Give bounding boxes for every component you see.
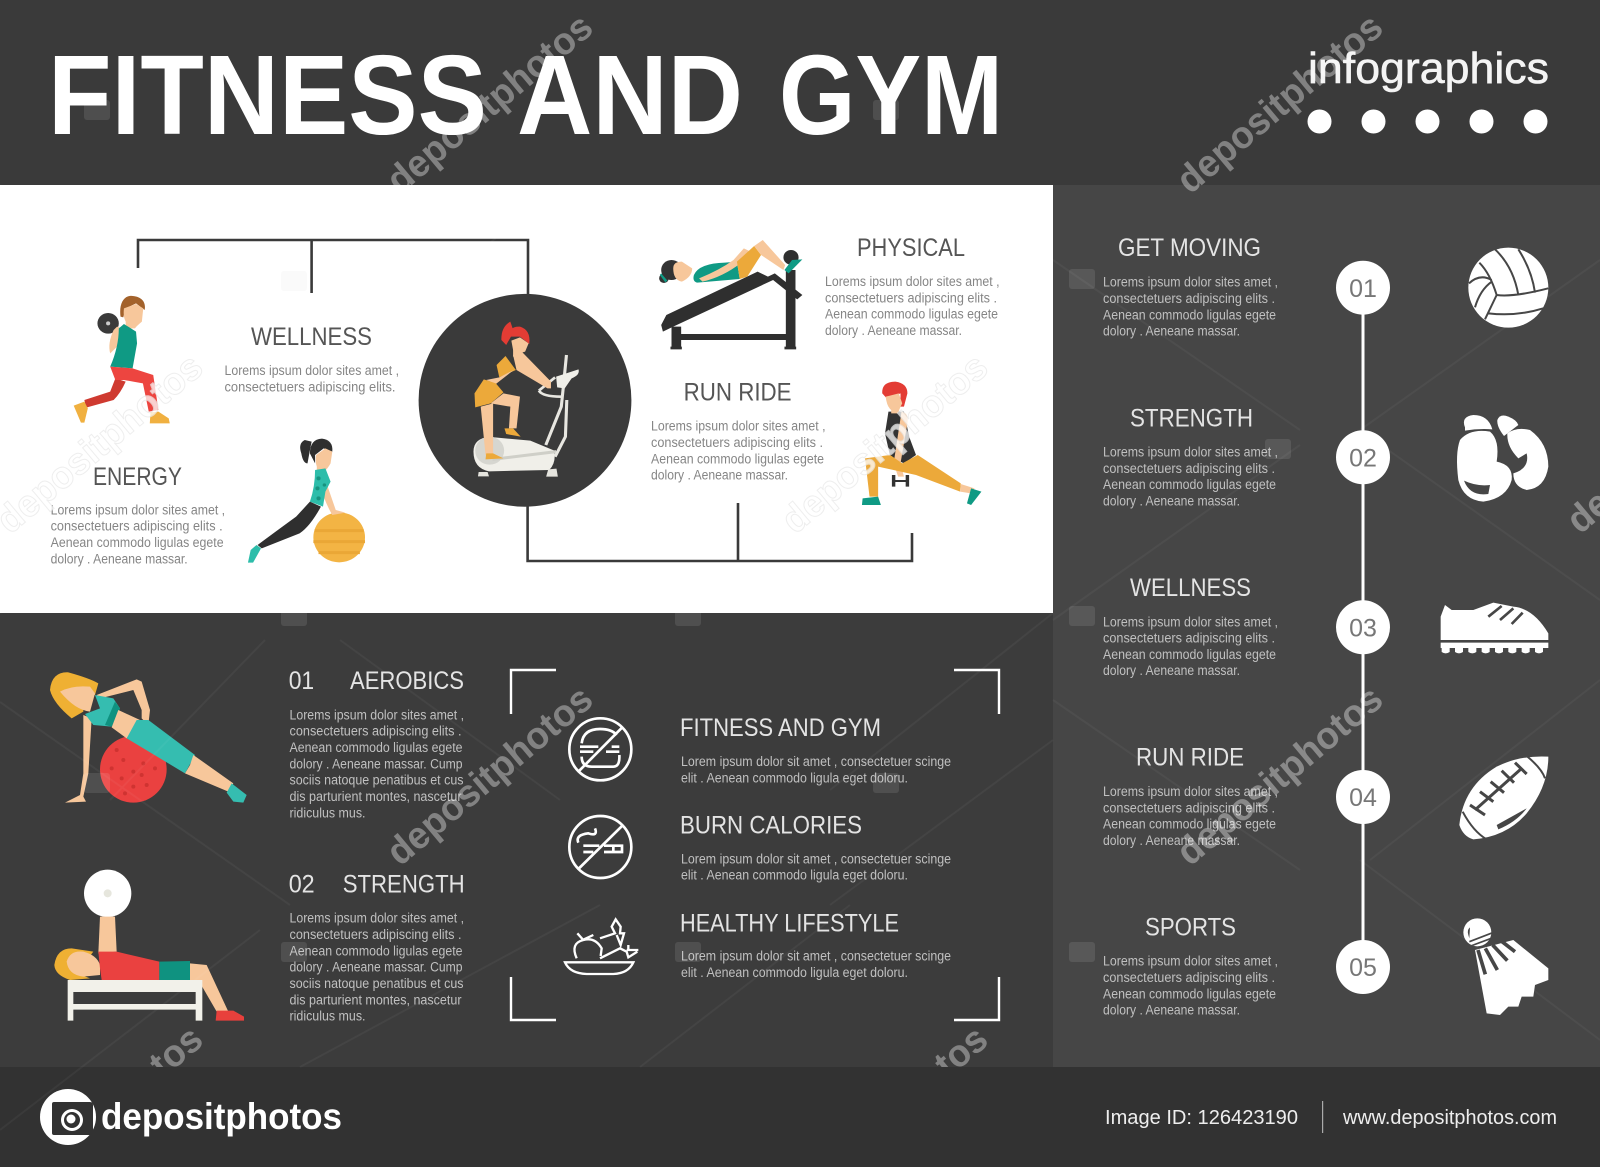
block: get moving: Aenean commodo ligulas egete [1103, 307, 1276, 322]
block: run ride: RUN RIDE [684, 379, 792, 407]
figure: man lunging with weight plate [74, 296, 170, 423]
block: wellness right: consectetuers adipiscing elits . [1103, 631, 1275, 646]
timeline: 01 [1349, 275, 1377, 303]
title: AND [517, 32, 743, 158]
block: wellness right: WELLNESS [1130, 574, 1251, 602]
block: run ride: dolory . Aeneane massar. [651, 468, 788, 483]
block: 01 aerobics: 01 [289, 667, 314, 695]
block: physical: PHYSICAL [857, 234, 965, 262]
figure: woman lunging with dumbbell [862, 382, 981, 505]
subtitle: infographics [1308, 44, 1549, 93]
block: sports: Aenean commodo ligulas egete [1103, 986, 1276, 1001]
figure: woman with yellow ball [248, 439, 365, 563]
title [48, 32, 1003, 158]
block: wellness: WELLNESS [251, 323, 372, 351]
block: 02 strength: Lorems ipsum dolor sites amet , [290, 911, 464, 926]
block: burn calories: elit . Aenean commodo ligula eget doloru. [681, 868, 908, 883]
block: healthy lifestyle: HEALTHY LIFESTYLE [680, 909, 899, 937]
block: 01 aerobics: Lorems ipsum dolor sites amet , [290, 707, 464, 722]
panel: white exercises diagram [0, 185, 1053, 613]
block: energy: Lorems ipsum dolor sites amet , [51, 502, 225, 517]
icon: volleyball [1468, 248, 1548, 328]
block: run ride: consectetuers adipiscing elits . [651, 435, 823, 450]
block: 01 aerobics: sociis natoque penatibus et cus [290, 773, 464, 788]
figure: woman on red ball [50, 672, 247, 803]
block: run ride: Lorems ipsum dolor sites amet , [651, 419, 826, 434]
block: physical: consectetuers adipiscing elits . [825, 290, 997, 305]
block: run ride [651, 379, 826, 483]
block: physical [825, 234, 1000, 338]
block: energy [51, 463, 225, 566]
header dots [1308, 110, 1548, 134]
block: strength: consectetuers adipiscing elits . [1103, 461, 1275, 476]
header band [0, 0, 1600, 185]
title: GYM [779, 32, 1003, 158]
timeline: 03 [1349, 614, 1377, 642]
block: energy: consectetuers adipiscing elits . [51, 519, 223, 534]
block: 02 strength [289, 871, 465, 1024]
block: wellness right [1103, 574, 1278, 678]
block: wellness right: dolory . Aeneane massar. [1103, 663, 1240, 678]
block: run ride right: RUN RIDE [1136, 743, 1244, 771]
timeline: 04 [1349, 784, 1377, 812]
block: 01 aerobics: consectetuers adipiscing elits . [290, 724, 462, 739]
timeline [1336, 261, 1390, 994]
block: burn calories: Lorem ipsum dolor sit amet , consectetuer scinge [681, 851, 951, 866]
block: strength [1103, 404, 1278, 508]
block: 01 aerobics [289, 667, 464, 820]
block: physical: dolory . Aeneane massar. [825, 323, 962, 338]
icon: american football [1459, 756, 1548, 839]
block: wellness right: Lorems ipsum dolor sites amet , [1103, 614, 1278, 629]
icon: shuttlecock [1463, 918, 1548, 1015]
block: physical: Aenean commodo ligulas egete [825, 307, 998, 322]
figure: woman on elliptical trainer [473, 322, 579, 477]
block: sports: dolory . Aeneane massar. [1103, 1003, 1240, 1018]
footer image id: Image ID: 126423190 [1105, 1107, 1298, 1129]
block: 02 strength: STRENGTH [343, 871, 465, 899]
block: wellness: consectetuers adipiscing elits. [224, 379, 396, 394]
block: sports: SPORTS [1145, 914, 1236, 942]
panel: right timeline [1053, 185, 1600, 1067]
block: energy: dolory . Aeneane massar. [51, 551, 188, 566]
block: sports: Lorems ipsum dolor sites amet , [1103, 954, 1278, 969]
watermark overlay: depositphotos [774, 346, 996, 542]
block: run ride right: consectetuers adipiscing elits . [1103, 800, 1275, 815]
figure: man bench pressing [54, 870, 244, 1021]
block: fitness and gym: elit . Aenean commodo ligula eget doloru. [681, 770, 908, 786]
title: FITNESS [48, 32, 487, 158]
watermark overlay: depositphotos [379, 6, 601, 202]
block: 02 strength: ridiculus mus. [290, 1009, 366, 1024]
footer logo [40, 1089, 342, 1145]
block: run ride right: Lorems ipsum dolor sites amet , [1103, 784, 1278, 799]
block: energy: ENERGY [93, 463, 182, 491]
block: 01 aerobics: ridiculus mus. [290, 805, 366, 820]
corner brackets [511, 670, 999, 1020]
block: 01 aerobics: dis parturient montes, nascetur [290, 789, 462, 804]
timeline: 05 [1349, 954, 1377, 982]
block: 02 strength: Aenean commodo ligulas egete [290, 943, 462, 958]
footer band [0, 1067, 1600, 1167]
block: physical: Lorems ipsum dolor sites amet , [825, 274, 1000, 289]
watermark overlay: depositphotos [379, 678, 601, 874]
block: strength: Aenean commodo ligulas egete [1103, 477, 1276, 492]
block: fitness and gym: FITNESS AND GYM [680, 714, 881, 742]
block: strength: dolory . Aeneane massar. [1103, 493, 1240, 508]
footer logo: depositphotos [101, 1096, 342, 1137]
block: 02 strength: consectetuers adipiscing elits . [290, 927, 462, 942]
block: fitness and gym [680, 714, 951, 786]
footer website: www.depositphotos.com [1342, 1107, 1557, 1129]
block: wellness: Lorems ipsum dolor sites amet , [224, 363, 399, 378]
block: run ride: Aenean commodo ligulas egete [651, 451, 824, 466]
icon: no burger [569, 718, 631, 780]
timeline: 02 [1349, 444, 1377, 472]
block: 02 strength: dolory . Aeneane massar. Cump [290, 960, 462, 975]
block: get moving [1103, 234, 1278, 339]
block: sports [1103, 914, 1278, 1018]
icon: healthy food plate [565, 919, 638, 974]
block: fitness and gym: Lorem ipsum dolor sit amet , consectetuer scinge [681, 754, 951, 769]
block: get moving: Lorems ipsum dolor sites amet , [1103, 275, 1278, 290]
connector lines [138, 240, 912, 561]
block: burn calories: BURN CALORIES [680, 811, 862, 839]
block: healthy lifestyle [680, 909, 951, 980]
block: get moving: consectetuers adipiscing elits . [1103, 291, 1275, 306]
block: healthy lifestyle: elit . Aenean commodo ligula eget doloru. [681, 965, 908, 980]
block: 01 aerobics: AEROBICS [350, 667, 464, 695]
block: run ride right: dolory . Aeneane massar. [1103, 833, 1240, 848]
icon: no smoking [569, 816, 631, 878]
block: strength: Lorems ipsum dolor sites amet , [1103, 444, 1278, 460]
figure: woman on incline bench [659, 240, 802, 349]
block: wellness right: Aenean commodo ligulas egete [1103, 647, 1276, 662]
panel: lower left dark [0, 613, 1053, 1067]
block: energy: Aenean commodo ligulas egete [51, 535, 224, 550]
block: get moving: GET MOVING [1118, 234, 1261, 262]
icon: boxing gloves [1457, 415, 1548, 502]
block: run ride right [1103, 743, 1278, 848]
block: 02 strength: sociis natoque penatibus et cus [290, 976, 464, 991]
watermark overlay: depositphotos [1169, 678, 1391, 874]
block: healthy lifestyle: Lorem ipsum dolor sit amet , consectetuer scinge [681, 949, 951, 964]
block: get moving: dolory . Aeneane massar. [1103, 324, 1240, 339]
icon: football boot [1441, 603, 1548, 653]
block: strength: STRENGTH [1130, 404, 1253, 432]
block: sports: consectetuers adipiscing elits . [1103, 970, 1275, 985]
block: burn calories [680, 811, 951, 883]
block: 02 strength: 02 [289, 871, 315, 899]
central dark circle [419, 294, 631, 507]
block: 01 aerobics: Aenean commodo ligulas egete [290, 740, 462, 755]
block: wellness [224, 323, 399, 394]
watermark overlay: depositphotos [1169, 6, 1391, 202]
block: 02 strength: dis parturient montes, nascetur [290, 992, 462, 1007]
block: run ride right: Aenean commodo ligulas egete [1103, 817, 1276, 832]
block: 01 aerobics: dolory . Aeneane massar. Cump [290, 756, 462, 771]
